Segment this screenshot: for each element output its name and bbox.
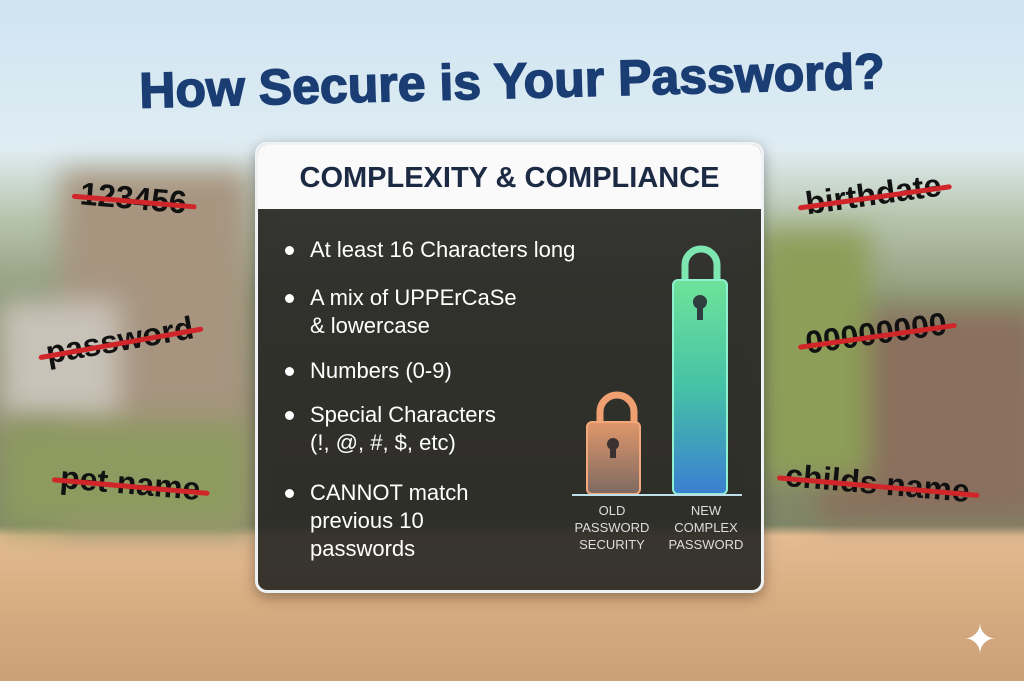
panel heading bbox=[258, 145, 761, 209]
new lock bbox=[673, 249, 727, 494]
crossed word: 123456: 123456 bbox=[79, 175, 188, 221]
label: old password security: SECURITY bbox=[579, 537, 645, 552]
background: blurred campus bbox=[60, 170, 250, 530]
bullet 2: A mix of UPPErCaSe bbox=[310, 285, 517, 310]
chart: lock bars bbox=[572, 246, 742, 496]
crossed word: pet name: pet name bbox=[59, 459, 202, 507]
panel: complexity & compliance bbox=[255, 142, 764, 593]
label: new complex password: COMPLEX bbox=[674, 520, 738, 535]
bullet 4 bbox=[285, 401, 496, 457]
bullet 5: previous 10 bbox=[310, 508, 424, 533]
label: new complex password: PASSWORD bbox=[669, 537, 743, 552]
crossed word: childs name: childs name bbox=[784, 457, 971, 509]
label: old password security: OLD bbox=[599, 503, 625, 518]
bullet 4: (!, @, #, $, etc) bbox=[310, 430, 456, 455]
crossed word: 00000000: 00000000 bbox=[803, 305, 949, 361]
bullet 1: At least 16 Characters long bbox=[310, 237, 575, 262]
icon: sparkle: ✦ bbox=[963, 618, 997, 662]
bullet 4: Special Characters bbox=[310, 402, 496, 427]
title: How Secure is Your Password? bbox=[139, 43, 885, 119]
label: new complex password bbox=[669, 503, 743, 552]
crossed word: birthdate: birthdate bbox=[803, 167, 944, 221]
bullet 2: & lowercase bbox=[310, 313, 430, 338]
bullet 5 bbox=[285, 479, 469, 563]
bullet 2 bbox=[285, 284, 517, 340]
bullet 3: Numbers (0-9) bbox=[310, 358, 452, 383]
bullet 5: CANNOT match bbox=[310, 480, 469, 505]
label: old password security bbox=[575, 503, 649, 552]
label: old password security: PASSWORD bbox=[575, 520, 649, 535]
label: new complex password: NEW bbox=[691, 503, 721, 518]
old lock bbox=[587, 395, 640, 494]
bullet 5: passwords bbox=[310, 536, 415, 561]
bullet list bbox=[285, 237, 575, 561]
panel heading: COMPLEXITY & COMPLIANCE bbox=[300, 162, 720, 194]
crossed word: password: password bbox=[43, 309, 196, 371]
baseline bbox=[572, 494, 742, 496]
